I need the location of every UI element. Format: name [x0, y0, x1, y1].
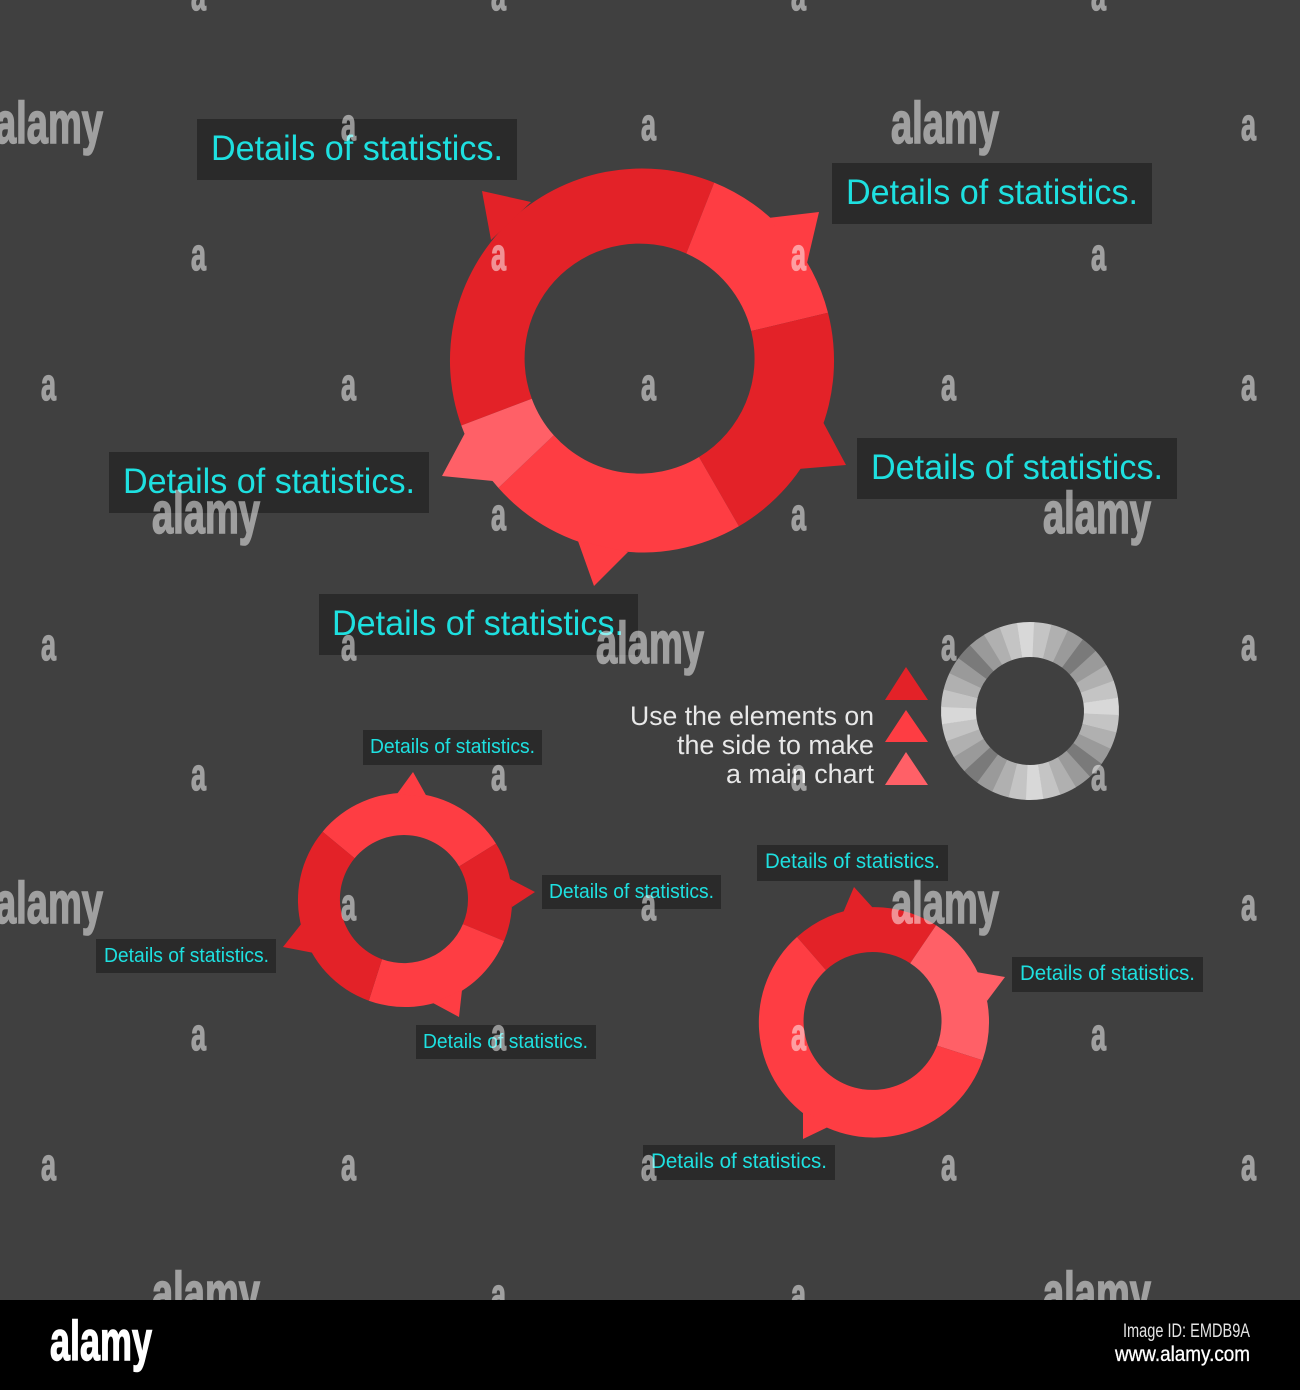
stock watermark pattern: a [1241, 99, 1257, 150]
label: right donut bottom [643, 1145, 835, 1180]
instruction text: the side to make [677, 730, 874, 760]
small donut chart: left [283, 772, 535, 1017]
segment: pink left with pointer [442, 399, 554, 488]
label: main chart right: Details of statistics. [871, 448, 1163, 487]
label: main chart top right: Details of statistics. [846, 173, 1138, 212]
stock watermark pattern: a [641, 1139, 657, 1190]
segment: pink right with pointer [910, 925, 1005, 1060]
label: left donut left: Details of statistics. [104, 945, 269, 967]
stock watermark pattern: a [791, 229, 807, 280]
stock watermark pattern: a [341, 879, 357, 930]
stock watermark pattern: a [791, 1269, 807, 1320]
stock watermark pattern: a [41, 1139, 57, 1190]
triangle: pink [885, 752, 928, 785]
segment: light top-right with pointer [686, 183, 828, 331]
label: main chart left: Details of statistics. [123, 462, 415, 501]
stock watermark pattern: a [941, 619, 957, 670]
stock watermark pattern: a [1091, 1009, 1107, 1060]
stock watermark pattern: a [941, 359, 957, 410]
stock watermark pattern: alamy [152, 1261, 260, 1326]
stock watermark pattern: a [191, 749, 207, 800]
segment: dark top-left with pointer [450, 168, 714, 425]
stock watermark pattern: a [41, 359, 57, 410]
label: main chart top left: Details of statistics. [211, 129, 503, 168]
website: www.alamy.com [1114, 1343, 1250, 1366]
stock watermark pattern: a [341, 619, 357, 670]
stock watermark pattern: a [791, 489, 807, 540]
stock watermark pattern: a [1091, 229, 1107, 280]
small donut chart: right [759, 887, 1005, 1139]
label: main chart bottom: Details of statistics. [332, 604, 624, 643]
label: main chart left [109, 452, 429, 513]
label: left donut right [542, 875, 721, 909]
segment: dark top with pointer [797, 887, 936, 970]
stock watermark pattern: alamy [1043, 481, 1151, 546]
label: main chart top left [197, 119, 517, 180]
label: right donut bottom: Details of statistics. [651, 1150, 827, 1173]
stock watermark pattern: a [1241, 1139, 1257, 1190]
stock watermark pattern: a [1241, 359, 1257, 410]
segment: light bottom with pointer [369, 924, 504, 1017]
label: left donut top [363, 730, 542, 765]
stock watermark pattern: a [1091, 749, 1107, 800]
stock watermark pattern: alamy [891, 91, 999, 156]
label: right donut top: Details of statistics. [765, 850, 940, 873]
instruction text: a main chart [726, 759, 874, 789]
triangle: red [885, 710, 928, 742]
stock watermark pattern: a [941, 1139, 957, 1190]
stock watermark pattern: alamy [152, 481, 260, 546]
segment: light top with pointer [323, 772, 496, 866]
stock watermark pattern: a [791, 1009, 807, 1060]
label: left donut left [96, 939, 276, 973]
footer logo: alamy [50, 1309, 152, 1372]
stock watermark pattern: a [341, 99, 357, 150]
stock watermark pattern: a [641, 879, 657, 930]
stock watermark pattern: alamy [891, 871, 999, 936]
label: left donut bottom [416, 1025, 596, 1059]
stock watermark pattern: a [41, 619, 57, 670]
image id: Image ID: EMDB9A [1123, 1321, 1250, 1342]
segment: dark right with pointer [699, 313, 846, 526]
segment: light large with pointer [759, 937, 982, 1139]
stock watermark pattern: a [341, 1139, 357, 1190]
segment: dark left with pointer [283, 832, 382, 1001]
stock watermark pattern: alamy [596, 611, 704, 676]
label: main chart bottom [319, 594, 638, 655]
stock watermark pattern: a [491, 229, 507, 280]
legend triangles [885, 667, 928, 785]
label: main chart right [857, 438, 1177, 499]
stock watermark pattern: a [641, 99, 657, 150]
stock watermark pattern: a [1241, 879, 1257, 930]
label: left donut bottom: Details of statistics. [423, 1031, 588, 1053]
stock watermark pattern: a [491, 1269, 507, 1320]
label: left donut right: Details of statistics. [549, 881, 714, 903]
main donut chart [442, 168, 846, 586]
instruction text: Use the elements on [630, 701, 874, 731]
label: left donut top: Details of statistics. [370, 736, 535, 758]
stock watermark pattern: a [191, 229, 207, 280]
stock watermark pattern: a [341, 359, 357, 410]
triangle: dark red [885, 667, 928, 700]
stock watermark pattern: a [641, 359, 657, 410]
label: right donut top [757, 845, 948, 881]
stock watermark pattern: a [191, 1009, 207, 1060]
stock watermark pattern: alamy [1043, 1261, 1151, 1326]
label: right donut right [1012, 957, 1203, 992]
stock watermark pattern: a [491, 489, 507, 540]
instruction text [630, 701, 874, 789]
label: main chart top right [832, 163, 1152, 224]
label: right donut right: Details of statistics. [1020, 962, 1195, 985]
stock watermark pattern: a [1241, 619, 1257, 670]
segment: dark right with pointer [459, 844, 535, 941]
stock watermark pattern: a [491, 1009, 507, 1060]
grey segmented ring [929, 610, 1131, 812]
segment: light bottom with pointer [498, 435, 739, 586]
footer bar [0, 1300, 1300, 1390]
stock watermark pattern: a [791, 749, 807, 800]
stock watermark pattern: a [491, 749, 507, 800]
